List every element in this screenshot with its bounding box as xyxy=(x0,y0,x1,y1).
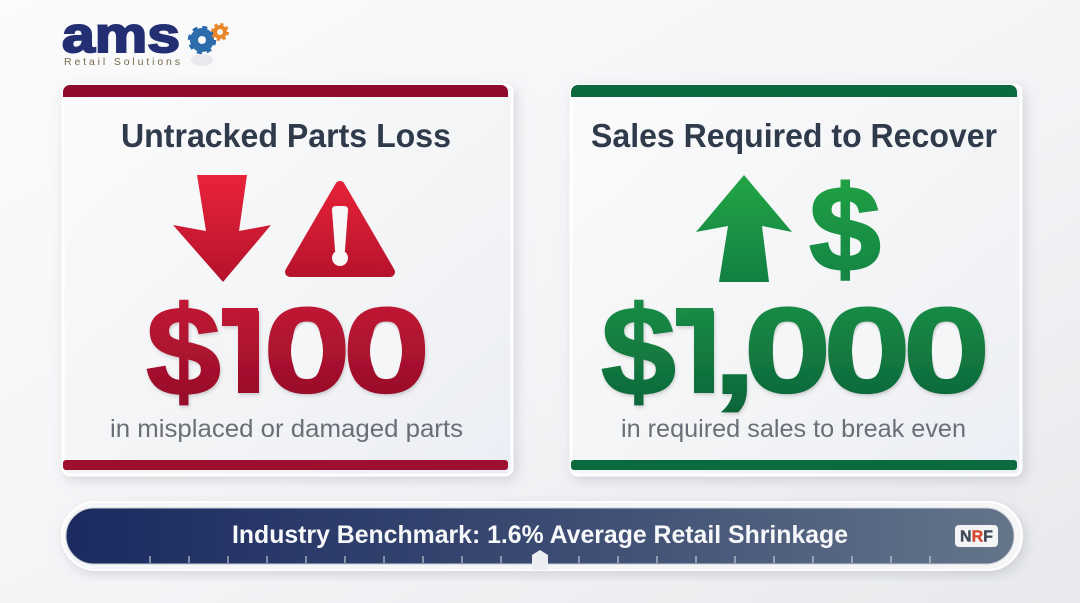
bar frame xyxy=(62,502,1022,570)
big number: $1,000: 0 xyxy=(903,282,990,418)
icon: up arrow xyxy=(696,175,792,282)
benchmark marker xyxy=(532,550,548,570)
heading: Untracked Parts Loss xyxy=(121,117,451,154)
bar label: Industry Benchmark: 1.6% Average Retail Shrinkage xyxy=(232,521,848,549)
icon: down arrow xyxy=(173,175,271,282)
big number: $1,000: 0 xyxy=(744,282,831,418)
NRF badge: NRF xyxy=(960,528,993,546)
NRF badge xyxy=(955,525,998,547)
card top bar xyxy=(63,85,508,97)
big number: $100: 0 xyxy=(343,282,430,418)
big number: $1,000: 1 xyxy=(660,286,742,419)
gear reflection xyxy=(191,54,213,66)
icon: dollar sign: $ xyxy=(809,162,881,297)
bar fill xyxy=(66,508,1014,564)
big number: $1,000: , xyxy=(713,286,756,419)
heading: Sales Required to Recover xyxy=(591,117,997,154)
big number: $1,000 xyxy=(602,300,988,416)
card body xyxy=(571,85,1021,475)
card top bar xyxy=(571,85,1017,97)
scale ticks xyxy=(150,556,930,563)
benchmark bar xyxy=(62,502,1022,570)
zero counters xyxy=(291,323,402,379)
big number: $100: $ xyxy=(146,280,221,422)
big number: $100: 0 xyxy=(263,282,351,418)
logo wordmark: ams xyxy=(62,6,180,63)
card bottom bar xyxy=(571,460,1017,470)
big number: $100 xyxy=(146,300,428,409)
card body xyxy=(63,85,512,475)
icon: blue gear xyxy=(190,28,214,52)
panel: untracked parts loss xyxy=(63,85,512,475)
subtitle: in required sales to break even xyxy=(621,415,966,443)
big number: $100: 1 xyxy=(205,286,286,419)
card bottom bar xyxy=(63,460,508,470)
big number: $1,000: $ xyxy=(601,280,676,422)
subtitle: in misplaced or damaged parts xyxy=(110,415,463,443)
icon: warning triangle xyxy=(290,186,390,272)
icon: orange gear xyxy=(212,24,228,40)
zero counters xyxy=(773,323,962,379)
panel: sales required to recover xyxy=(571,85,1021,475)
logo: AMS Retail Solutions xyxy=(62,6,228,68)
big number: $1,000: 0 xyxy=(823,282,911,418)
logo tagline: Retail Solutions xyxy=(64,56,180,68)
